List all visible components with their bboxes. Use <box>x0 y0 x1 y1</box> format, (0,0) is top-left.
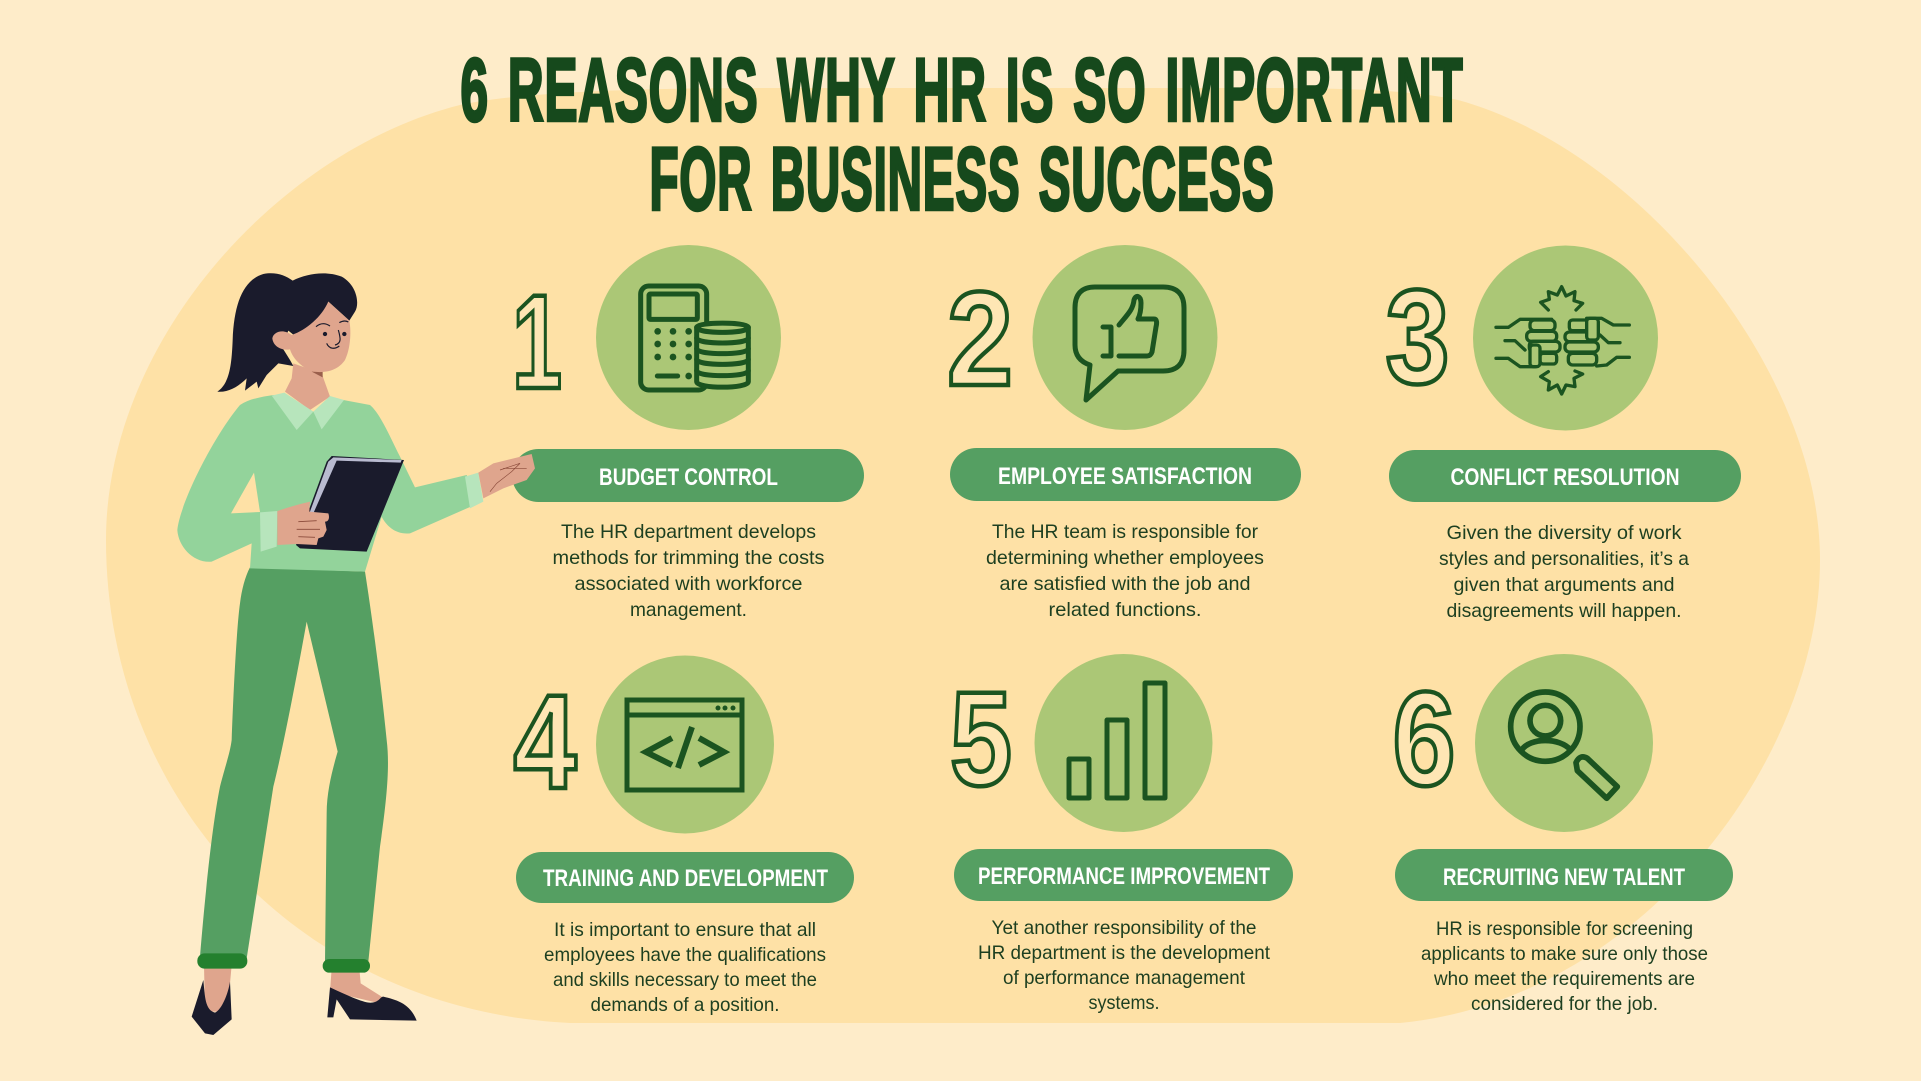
pill label 1: BUDGET CONTROL <box>599 464 778 491</box>
description 5: HR department is the development <box>978 942 1271 964</box>
description 3 <box>1439 522 1689 622</box>
number 3: 3 <box>1386 263 1450 412</box>
item 6: recruiting new talent <box>1392 654 1733 1015</box>
pill label 2: EMPLOYEE SATISFACTION <box>998 463 1252 490</box>
description 4: and skills necessary to meet the <box>553 969 817 991</box>
description 1: The HR department develops <box>561 521 816 543</box>
title <box>460 40 1464 228</box>
icon circle 6 <box>1475 654 1653 832</box>
pill 5 <box>954 849 1293 901</box>
description 2: related functions. <box>1048 599 1202 621</box>
description 6: who meet the requirements are <box>1433 968 1695 990</box>
icon: fist bump <box>1496 287 1629 394</box>
number 4: 4 <box>514 668 576 817</box>
item 5: performance improvement <box>950 654 1293 1014</box>
description 5 <box>978 917 1271 1014</box>
description 6: HR is responsible for screening <box>1436 918 1693 940</box>
description 4 <box>544 919 826 1016</box>
description 3: Given the diversity of work <box>1446 522 1682 544</box>
head with ponytail <box>217 273 357 410</box>
pill label 4: TRAINING AND DEVELOPMENT <box>543 865 828 892</box>
torso and arms with tablet <box>177 393 535 572</box>
number 6: 6 <box>1392 665 1456 814</box>
icon: bar chart <box>1069 683 1165 798</box>
pill 4 <box>516 852 854 903</box>
description 2 <box>986 521 1264 621</box>
number 1: 1 <box>512 268 562 417</box>
description 1 <box>552 521 825 621</box>
pill label 6: RECRUITING NEW TALENT <box>1443 864 1685 891</box>
description 2: The HR team is responsible for <box>992 521 1258 543</box>
description 4: employees have the qualifications <box>544 944 826 966</box>
icon circle 1 <box>596 245 781 430</box>
pill 6 <box>1395 849 1733 901</box>
number 5: 5 <box>950 665 1012 814</box>
icon circle 2 <box>1032 245 1218 430</box>
description 6: applicants to make sure only those <box>1421 943 1708 965</box>
icon circle 3 <box>1473 246 1658 430</box>
item 4: training and development <box>514 656 854 1016</box>
icon circle 4 <box>596 656 774 834</box>
description 3: styles and personalities, it’s a <box>1439 548 1689 570</box>
icon: calculator and coins <box>641 286 748 390</box>
icon: code window <box>627 700 742 790</box>
description 3: disagreements will happen. <box>1446 600 1682 622</box>
icon circle 5 <box>1034 654 1212 832</box>
description 2: are satisfied with the job and <box>1000 573 1250 595</box>
description 1: methods for trimming the costs <box>552 547 825 569</box>
legs and shoes <box>192 567 417 1035</box>
icon: thumbs up speech bubble <box>1075 287 1184 400</box>
description 5: Yet another responsibility of the <box>992 917 1256 939</box>
item 1: budget control <box>512 245 864 621</box>
item 2: employee satisfaction <box>947 245 1301 621</box>
description 1: associated with workforce <box>574 573 802 595</box>
pill label 3: CONFLICT RESOLUTION <box>1450 464 1680 491</box>
description 6: considered for the job. <box>1471 993 1658 1015</box>
pill 1 <box>512 449 864 502</box>
background blob <box>106 88 1820 1023</box>
description 2: determining whether employees <box>986 547 1264 569</box>
icon: magnifier with person <box>1511 692 1617 798</box>
description 5: of performance management <box>1003 967 1246 989</box>
description 4: demands of a position. <box>590 994 780 1016</box>
title: FOR BUSINESS SUCCESS <box>650 128 1274 228</box>
description 1: management. <box>630 599 747 621</box>
figure: woman holding tablet <box>177 273 535 1035</box>
pill label 5: PERFORMANCE IMPROVEMENT <box>978 863 1270 890</box>
number 2: 2 <box>947 265 1013 414</box>
pill 2 <box>950 448 1301 501</box>
description 5: systems. <box>1088 992 1160 1014</box>
item 3: conflict resolution <box>1386 246 1741 622</box>
pill 3 <box>1389 450 1741 502</box>
description 6 <box>1421 918 1708 1015</box>
description 4: It is important to ensure that all <box>554 919 816 941</box>
description 3: given that arguments and <box>1454 574 1674 596</box>
